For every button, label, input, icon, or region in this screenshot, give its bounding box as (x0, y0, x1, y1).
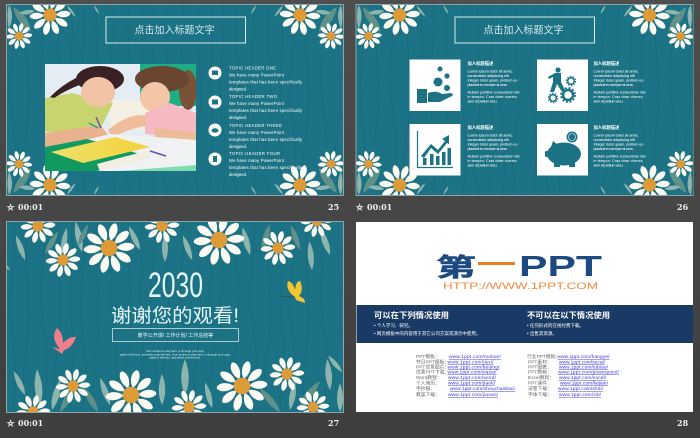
icon: mail (208, 66, 222, 80)
text: column right bottom: placerat eu semper at urna. (594, 146, 634, 151)
text: column right bottom: consectetur adipiscing elit. (594, 137, 636, 142)
text: topic three (229, 123, 303, 149)
footer: slide 26 status (356, 202, 689, 212)
text: topic one: We have many PowerPoint (229, 72, 285, 78)
link list right: www.1ppt.com/excel/ (559, 375, 607, 381)
icon: pink butterfly (47, 328, 76, 354)
text: column left bottom: 加入标题描述 (468, 124, 494, 131)
text: topic four: We have many PowerPoint (229, 158, 285, 163)
text: column right top: Lorem ipsum dolor sit amet, (594, 68, 638, 74)
text: column left top: placerat eu semper at urna. (468, 82, 508, 87)
icon: yellow butterfly (281, 281, 305, 303)
logo: 第 (436, 248, 476, 284)
text: topic three: We have many PowerPoint (229, 130, 285, 135)
link list left: PPT模板： (416, 353, 440, 360)
icon: runner on gears (537, 60, 588, 111)
text: column left top: consectetur adipiscing elit. (468, 73, 510, 78)
link list right: PPT图表： (528, 364, 552, 370)
list: four topics with icons (208, 66, 303, 177)
link list left: Word教程： (416, 374, 442, 381)
text: topic four: TOPIC HEADER FOUR (229, 151, 280, 156)
panel: slide 25 (3, 0, 347, 210)
link list left: www.1ppt.com/beijing/ (448, 364, 500, 370)
footer: slide 26 status: ☆ (356, 202, 364, 212)
text: column right top: consectetur adipiscing elit. (594, 73, 636, 78)
subtitle box (112, 328, 238, 342)
band: usage rules: • 出售其资源。 (527, 330, 557, 337)
footer: slide 25 status: ☆ (7, 202, 15, 212)
band: usage rules: • 个人学习、研究。 (374, 322, 413, 329)
link list right: 字体下载： (528, 391, 552, 398)
footer: slide 27 status: 27 (328, 418, 339, 428)
icon: bin (208, 152, 222, 166)
text: column left bottom: in tempor. Cras vitae viverra (468, 158, 517, 163)
icon: piggy bank (537, 124, 588, 176)
link list right: www.1ppt.com/shiti/ (558, 386, 604, 392)
text: column left bottom: consectetur adipiscing elit. (468, 137, 510, 142)
footer: slide 28 number: 28 (677, 418, 689, 428)
panel: slide 28 (356, 222, 693, 412)
footer: slide 27 status: ☆ (7, 418, 15, 428)
text: column right bottom: in tempor. Cras vitae viverra (594, 158, 643, 163)
icon: cloud (208, 124, 222, 136)
link list left: www.1ppt.com/xiazai/ (448, 370, 497, 376)
text: topic three: TOPIC HEADER THREE (229, 123, 282, 128)
link list right (527, 353, 620, 398)
link list right: www.1ppt.com/ziti/ (559, 392, 602, 398)
text: column left top: Lorem ipsum dolor sit amet, (468, 68, 512, 74)
small caption: Your content to play here, or through your copy (146, 349, 205, 353)
link list left: 教案下载： (416, 391, 440, 398)
footer: slide 25 status: 25 (328, 202, 339, 212)
band: usage rules: 不可以在以下情况使用 (527, 310, 610, 320)
text: column left top: sem at pretium arcu. (468, 98, 498, 104)
title box: 点击加入标题文字 (484, 24, 564, 36)
text: topic two: TOPIC HEADER TWO (229, 94, 278, 99)
small caption (120, 349, 231, 360)
band: usage rules: • 网页模板中的内容用于其它公司方案或演示中使用。 (374, 330, 480, 337)
logo (436, 248, 602, 292)
text: topic two: designed. (229, 115, 247, 120)
link list right: 行业PPT模板： (527, 353, 560, 360)
text: column right top: Integer dolor quam, pretium eu (594, 78, 644, 82)
subtitle box: 教学公开课/ 工作计划/ 工作总结等 (138, 332, 213, 339)
link list left: www.1ppt.com/moban/ (449, 354, 502, 360)
text: column right top: in tempor. Cras vitae viverra (594, 94, 643, 99)
text: column right top: sem at pretium arcu. (594, 98, 624, 104)
panel: slide 26 (352, 0, 696, 210)
link list left: www.1ppt.com/word/ (448, 375, 497, 381)
text: column left bottom: Lorem ipsum dolor sit amet, (468, 132, 512, 138)
text: column right top: placerat eu semper at urna. (594, 82, 634, 87)
link list left: PPT背景图片： (416, 364, 449, 370)
footer: slide 25 status: 00:01 (18, 202, 43, 212)
small caption: paste in this box, and select only the text. (149, 356, 201, 360)
text: column left top: in tempor. Cras vitae viverra (468, 94, 517, 99)
text: topic one: designed. (229, 86, 247, 92)
band: usage rules (356, 305, 693, 343)
text: column right top: Nullam porttitor consectetur nisi (594, 90, 646, 94)
small caption: paste in this box, and select only the text. Your content to play here, or through your copy (120, 352, 231, 356)
text: column left bottom: Nullam porttitor consectetur nisi (468, 154, 520, 158)
title box (106, 17, 246, 43)
text: column left bottom: sem at pretium arcu. (468, 162, 498, 168)
text: column right bottom: Lorem ipsum dolor sit amet, (594, 132, 638, 138)
band: usage rules: • 任何形式的在线付费下载。 (527, 322, 584, 329)
text: topic three: designed. (229, 144, 247, 149)
link list right: www.1ppt.com/hangye/ (558, 354, 610, 360)
link list right: www.1ppt.com/sucai/ (559, 360, 606, 366)
text: column right bottom (594, 124, 646, 168)
link list right: www.1ppt.com/powerpoint/ (558, 370, 620, 376)
text: column left top (468, 60, 520, 104)
link list left: 节日PPT模板： (416, 358, 449, 366)
text: topic two: We have many PowerPoint (229, 101, 285, 106)
link list right: www.1ppt.com/kejian/ (560, 380, 609, 386)
link list right: PPT素材： (528, 358, 552, 366)
link list left: www.1ppt.com/jiaoan/ (448, 392, 499, 398)
text: column left bottom: placerat eu semper at urna. (468, 146, 508, 151)
text: topic two (229, 94, 303, 120)
link list right: PPT课件： (528, 380, 552, 386)
text: column right top: 加入标题描述 (594, 60, 620, 67)
footer: slide 27 status (7, 418, 339, 428)
text: topic one: templates that has been specifically (229, 80, 303, 84)
text: topic three: templates that has been specifically (229, 137, 303, 142)
text: column right bottom: sem at pretium arcu. (594, 162, 624, 168)
title box (455, 17, 594, 43)
text: topic four (229, 151, 303, 177)
icon: rising chart (410, 124, 460, 176)
text: column right bottom: Nullam porttitor consectetur nisi (594, 154, 646, 158)
band: usage rules: 可以在下列情况使用 (374, 310, 449, 320)
footer: slide 26 status: 26 (677, 202, 689, 212)
text: column left top: 加入标题描述 (468, 60, 494, 67)
footer: slide 26 status: 00:01 (367, 202, 392, 212)
text: topic four: designed. (229, 172, 247, 177)
heading: thank you: 谢谢您的观看! (111, 305, 239, 327)
link list left: 手抄报： (416, 385, 435, 392)
title box: 点击加入标题文字 (134, 24, 214, 36)
heading: 2030: 2030 (148, 266, 203, 305)
link list right: 试卷下载： (528, 385, 552, 392)
text: column left bottom: Integer dolor quam, pretium eu (468, 142, 518, 146)
link list right: Excel教程： (528, 374, 554, 381)
text: topic one (229, 66, 303, 92)
text: column left top: Integer dolor quam, pretium eu (468, 78, 518, 82)
logo: HTTP://WWW.1PPT.COM (443, 281, 598, 292)
footer: slide 27 status: 00:01 (18, 418, 43, 428)
link list left: www.1ppt.com/jianli/ (448, 380, 496, 386)
text: topic two: templates that has been specifically (229, 108, 303, 113)
link list left: 个人简历： (416, 380, 440, 386)
link list left: www.1ppt.com/jieri/ (448, 360, 494, 366)
link list left (416, 353, 516, 398)
text: topic one: TOPIC HEADER ONE (229, 66, 276, 70)
photo: two girls drawing (45, 64, 197, 171)
footer: slide 25 status (7, 202, 339, 212)
link list left: 优秀PPT下载： (416, 368, 449, 376)
text: column right bottom: Integer dolor quam, pretium eu (594, 142, 644, 146)
text: topic four: templates that has been specifically (229, 165, 303, 170)
link list right: PPT教程： (528, 368, 552, 376)
link list right: www.1ppt.com/tubiao/ (559, 364, 609, 370)
icon: hand with coins (410, 60, 460, 111)
panel: slide 27 (6, 221, 344, 413)
text: column left bottom (468, 124, 520, 168)
logo: PPT (519, 251, 602, 283)
text: column right top (594, 60, 646, 104)
icon: picture (208, 96, 222, 108)
link list left: www.1ppt.com/shouchaobao/ (450, 386, 516, 392)
text: column right bottom: 加入标题描述 (594, 124, 620, 131)
text: column left top: Nullam porttitor consectetur nisi (468, 90, 520, 94)
